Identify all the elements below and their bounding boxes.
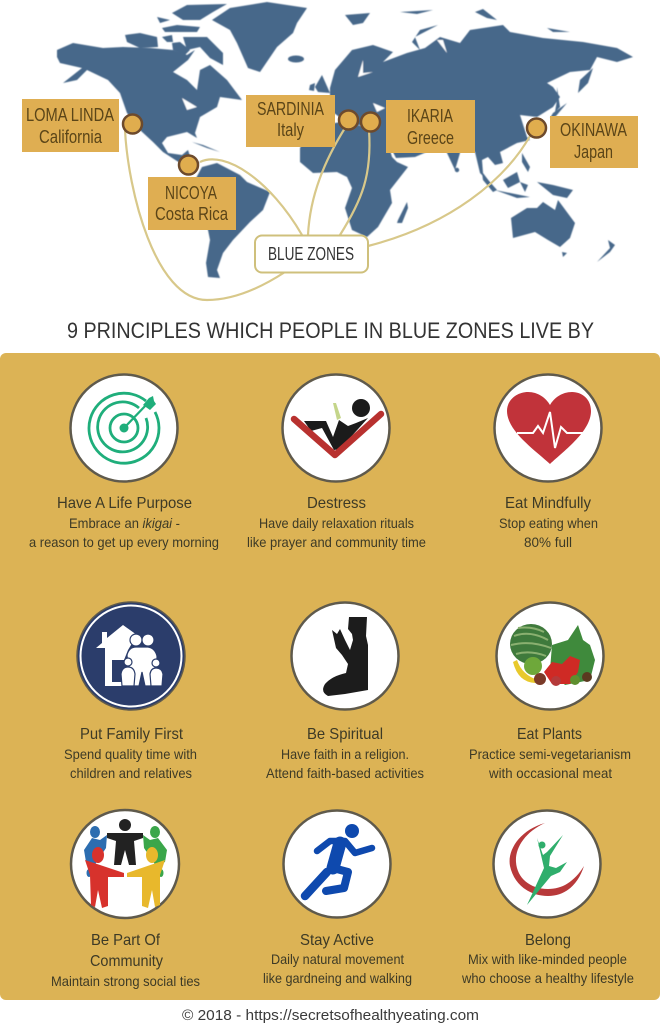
principle: Be Part Of Community (51, 810, 200, 989)
label: Okinawa: OKINAWA (560, 119, 628, 140)
panel: principles background (0, 353, 660, 1000)
label: Sardinia: SARDINIA (257, 98, 324, 119)
label: Nicoya: Costa Rica (155, 203, 229, 224)
icon: heart with pulse (494, 374, 602, 482)
location dots (123, 110, 546, 174)
label: Nicoya (148, 177, 236, 230)
label: Loma Linda (22, 99, 119, 152)
icon: target (70, 374, 178, 482)
principle: Eat Mindfully: 80% full (524, 534, 572, 550)
principle: Destress: Destress (307, 495, 366, 512)
icon: circle of people (71, 810, 179, 918)
label: Okinawa: Japan (574, 141, 613, 162)
label: Nicoya: NICOYA (165, 182, 217, 203)
principle: Destress (247, 374, 426, 550)
icon: reclining person (282, 374, 390, 482)
principle: Stay Active (263, 810, 412, 986)
principle: Be Part Of Community: Maintain strong social ties (51, 973, 200, 989)
world map (57, 2, 633, 278)
principle: Put Family First: children and relatives (70, 765, 192, 781)
principle: Put Family First: Put Family First (80, 726, 184, 743)
principle: Stay Active: Daily natural movement (271, 951, 404, 967)
principle: Be Part Of Community: Community (90, 953, 163, 970)
principle: Destress: like prayer and community time (247, 534, 426, 550)
label: Loma Linda: LOMA LINDA (26, 104, 115, 125)
principle: Destress: Have daily relaxation rituals (259, 515, 414, 531)
connector lines (125, 128, 530, 300)
icon: dancing figure and crescent (494, 810, 600, 918)
principle: Belong: who choose a healthy lifestyle (461, 970, 634, 986)
principle: Be Spiritual: Have faith in a religion. (281, 746, 409, 762)
principle: Eat Plants (469, 602, 631, 781)
icon: praying figure (292, 602, 398, 710)
principle: Have A Life Purpose (29, 374, 219, 550)
principle: Put Family First (64, 602, 197, 781)
principle: Eat Plants: Eat Plants (517, 726, 582, 743)
label: Sardinia: Italy (277, 119, 305, 140)
label: Ikaria: IKARIA (407, 105, 453, 126)
label: Blue Zones (255, 236, 368, 272)
principle: Have A Life Purpose: Have A Life Purpose (57, 495, 192, 512)
principle: Be Part Of Community: Be Part Of (91, 932, 161, 949)
label: Okinawa (550, 116, 638, 168)
principle: Belong (461, 810, 634, 986)
label: Ikaria: Greece (407, 127, 454, 148)
principle: Belong: Mix with like-minded people (468, 951, 627, 967)
label: Ikaria (386, 100, 475, 153)
principle: Eat Plants: Practice semi-vegetarianism (469, 746, 631, 762)
label: Blue Zones: BLUE ZONES (268, 244, 354, 264)
principle: Have A Life Purpose: Embrace an ikigai - (69, 515, 180, 531)
icon: family and house (77, 602, 185, 710)
label: Loma Linda: California (39, 126, 103, 147)
label: Sardinia (246, 95, 335, 147)
title: 9 PRINCIPLES WHICH PEOPLE IN BLUE ZONES LIVE BY (67, 318, 594, 343)
footer credit: © 2018 - https://secretsofhealthyeating.com (182, 1007, 479, 1024)
icon: fruit and vegetables (496, 602, 604, 710)
principle: Stay Active: Stay Active (300, 932, 374, 949)
principle: Eat Mindfully (494, 374, 602, 550)
principle: Eat Mindfully: Stop eating when (499, 515, 598, 531)
principle: Eat Mindfully: Eat Mindfully (505, 495, 591, 512)
icon: runner (284, 810, 390, 918)
principle: Have A Life Purpose: a reason to get up every morning (29, 534, 219, 550)
principle: Be Spiritual: Attend faith-based activities (266, 765, 424, 781)
principle: Belong: Belong (525, 932, 571, 949)
principle: Eat Plants: with occasional meat (488, 765, 612, 781)
principle: Stay Active: like gardneing and walking (263, 970, 412, 986)
principle: Be Spiritual: Be Spiritual (307, 726, 383, 743)
principle: Be Spiritual (266, 602, 424, 781)
principle: Put Family First: Spend quality time with (64, 746, 197, 762)
